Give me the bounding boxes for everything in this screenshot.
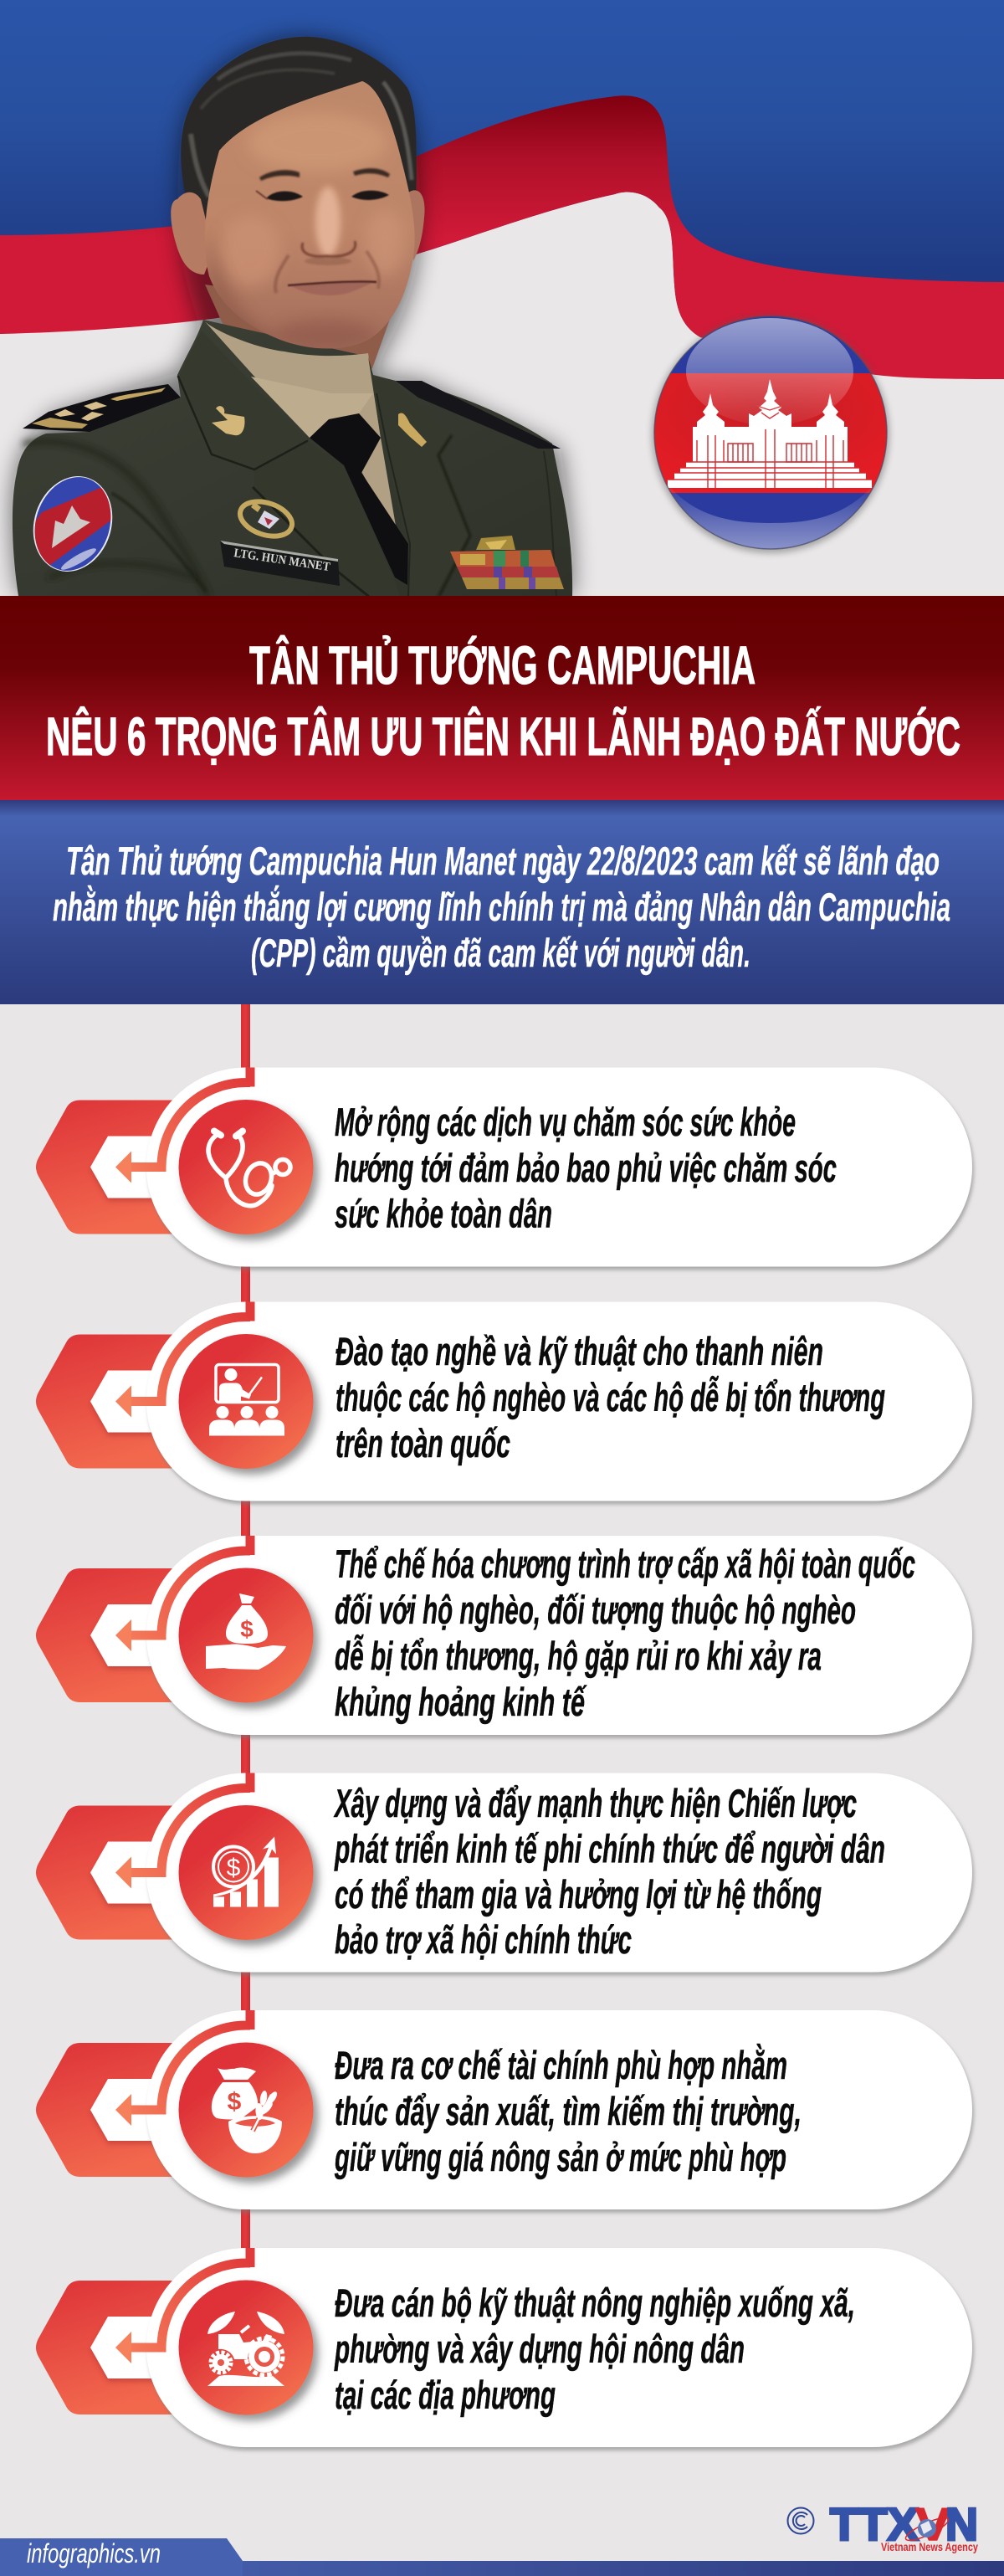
- text: khủng hoảng kinh tế: [335, 1680, 587, 1724]
- logo letters: TTX: [830, 2498, 919, 2550]
- arrow hexagon: [36, 2281, 201, 2414]
- arrow connector: [115, 1068, 250, 1183]
- inner hexagon: [90, 2317, 201, 2378]
- arrow hexagon: [36, 1100, 201, 1234]
- title band: [0, 596, 1004, 800]
- red wave: [0, 95, 1004, 379]
- arrow connector: [115, 1302, 250, 1418]
- text: [336, 1329, 885, 1465]
- card: [146, 1536, 972, 1735]
- portrait halo shadow: [11, 36, 573, 596]
- face: [205, 81, 415, 349]
- copyright mark: [788, 2507, 813, 2534]
- arrow hexagon: [36, 1568, 201, 1702]
- item 1: health care: [36, 1068, 972, 1267]
- eyebrows: [259, 168, 390, 181]
- item 2: vocational training: [36, 1302, 972, 1501]
- shirt shadow: [251, 377, 373, 438]
- name plate: [220, 541, 340, 586]
- arrow hexagon: [36, 1334, 201, 1468]
- header banner with waving flag: [0, 0, 1004, 596]
- inner hexagon: [90, 1841, 201, 1903]
- card: [146, 2010, 972, 2209]
- text: tại các địa phương: [335, 2373, 556, 2417]
- ear left: [171, 192, 213, 275]
- icon: coin and growth chart: $: [227, 1855, 241, 1881]
- eyes: [256, 191, 389, 201]
- icon circle: [179, 1805, 313, 1940]
- portrait of Hun Manet: [11, 36, 573, 596]
- agency logo TTXVN: N: [945, 2498, 978, 2550]
- text: [335, 1100, 837, 1235]
- icon circle: [179, 1100, 313, 1234]
- item 4: informal economy strategy: [36, 1773, 972, 1972]
- inner hexagon: [90, 1604, 201, 1666]
- ear right: [408, 190, 425, 261]
- icon circle: [179, 2042, 313, 2178]
- shirt collar: [203, 320, 397, 536]
- icon: money bag on hand: [206, 1593, 286, 1670]
- logo tagline: Vietnam News Agency: [881, 2540, 978, 2553]
- footer bar: [0, 2538, 1004, 2576]
- flag gloss: [686, 318, 853, 425]
- icon: stethoscope: [208, 1131, 290, 1206]
- inner hexagon: [90, 1137, 201, 1198]
- flag stripes: [653, 314, 889, 553]
- icon: money bag on hand: $: [240, 1616, 254, 1642]
- item 3: social allowance: [36, 1536, 972, 1735]
- arrow hexagon: [36, 1806, 201, 1940]
- jacket fold lines: [25, 377, 556, 596]
- icon: tractor with wheat: [207, 2312, 284, 2386]
- arrow connector: [115, 1773, 250, 1888]
- arrow connector: [115, 1536, 250, 1651]
- necktie: [310, 413, 408, 585]
- icon: coin and growth chart: [213, 1836, 279, 1906]
- agency logo TTXVN: [788, 2498, 978, 2553]
- collar pin right: [398, 413, 427, 447]
- temple red details: [668, 406, 872, 488]
- nose: [302, 241, 356, 265]
- left epaulette with stars: [23, 384, 181, 432]
- collar pin left: [212, 406, 244, 435]
- arrow connector: [115, 2010, 250, 2126]
- Cambodia flag badge: [652, 314, 889, 553]
- smile: [288, 281, 376, 295]
- text: trên toàn quốc: [336, 1421, 510, 1465]
- shoulder patch: [33, 476, 112, 572]
- footer tab: [0, 2538, 243, 2576]
- neck: [205, 285, 393, 418]
- text: [335, 1542, 915, 1724]
- left collar: [178, 331, 307, 470]
- arrow connector: [115, 2248, 250, 2363]
- text: bảo trợ xã hội chính thức: [335, 1917, 632, 1962]
- temple emblem: [668, 379, 872, 488]
- website text: infographics.vn: [27, 2538, 161, 2568]
- name plate: LTG. HUN MANET: [233, 547, 330, 574]
- medal ribbons: [450, 536, 564, 589]
- arrow hexagon: [36, 2043, 201, 2177]
- jacket: [13, 320, 572, 596]
- flag rim: [654, 316, 887, 549]
- vertical timeline line: [241, 1004, 250, 2260]
- text: [334, 2281, 855, 2417]
- icon: classroom: [209, 1364, 284, 1436]
- text: [333, 1781, 885, 1962]
- cap badge: [236, 495, 296, 542]
- item 5: financial mechanism: [36, 2010, 972, 2209]
- logo globe: [904, 2514, 950, 2544]
- icon circle: [179, 2280, 313, 2415]
- right lapel edge: [376, 393, 410, 596]
- right lapel: [368, 357, 469, 596]
- icon circle: [179, 1568, 313, 1702]
- text: [334, 2043, 802, 2179]
- card: [146, 1068, 972, 1267]
- agency logo TTXVN: V: [915, 2498, 950, 2550]
- card: [146, 1773, 972, 1972]
- right epaulette: [396, 381, 561, 449]
- inner hexagon: [90, 2079, 201, 2141]
- flag shadow: [652, 316, 889, 553]
- intro band: [0, 800, 1004, 1004]
- inner hexagon: [90, 1371, 201, 1433]
- card: [146, 2248, 972, 2447]
- text: phường và xây dựng hội nông dân: [334, 2327, 745, 2371]
- item 6: agricultural technicians: [36, 2248, 972, 2447]
- hair: [181, 37, 417, 251]
- icon: money bag, wheat and bowl: [212, 2068, 282, 2153]
- card: [146, 1302, 972, 1501]
- left lapel: [254, 441, 400, 596]
- icon: money bag, wheat and bowl: $: [228, 2088, 242, 2116]
- white lower background: [0, 192, 1004, 596]
- icon circle: [179, 1334, 313, 1469]
- face shading: [209, 112, 405, 352]
- text: sức khỏe toàn dân: [335, 1192, 552, 1235]
- blue sky background: [0, 0, 1004, 393]
